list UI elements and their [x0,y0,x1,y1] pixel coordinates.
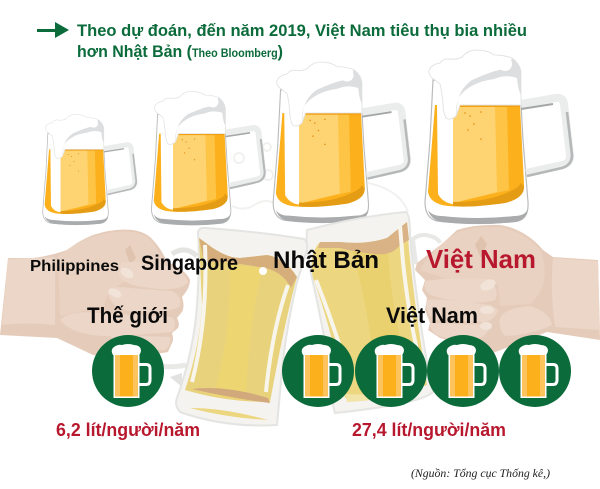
label: Thế giới: Thế giới [87,303,168,328]
mug: Việt Nam [425,50,572,224]
illustration: right fist [415,225,600,353]
label: Việt Nam black: Việt Nam [386,303,478,328]
glass: right [307,212,440,413]
title line one: Theo dự đoán, đến năm 2019, Việt Nam tiêu thụ bia nhiều [77,21,527,40]
mug: Nhật Bản [273,62,409,223]
chart: ranked beer mugs [43,50,572,225]
glass: left [162,228,307,425]
source note: (Nguồn: Tổng cục Thống kê,) [411,466,550,480]
mug: Philippines [43,114,136,225]
value: Vietnam: 27,4 lít/người/năm [352,420,506,440]
pictogram: Vietnam [282,335,571,407]
label: Singapore: Singapore [141,252,238,275]
icon: arrow [37,22,69,38]
illustration: toasting glasses [162,212,440,425]
country labels [30,244,536,328]
pictogram: world [92,335,164,407]
mug: Singapore [151,91,265,225]
decoration: faint bubbles behind mugs [232,143,408,212]
title [37,21,527,61]
value: world: 6,2 lít/người/năm [56,420,200,440]
illustration: left fist [0,230,190,360]
label: Philippines: Philippines [30,258,119,275]
label: Việt Nam red: Việt Nam [426,244,536,274]
title line two: hơn Nhật Bản (Theo Bloomberg) [77,42,283,61]
label: Nhật Bản: Nhật Bản [273,247,379,274]
